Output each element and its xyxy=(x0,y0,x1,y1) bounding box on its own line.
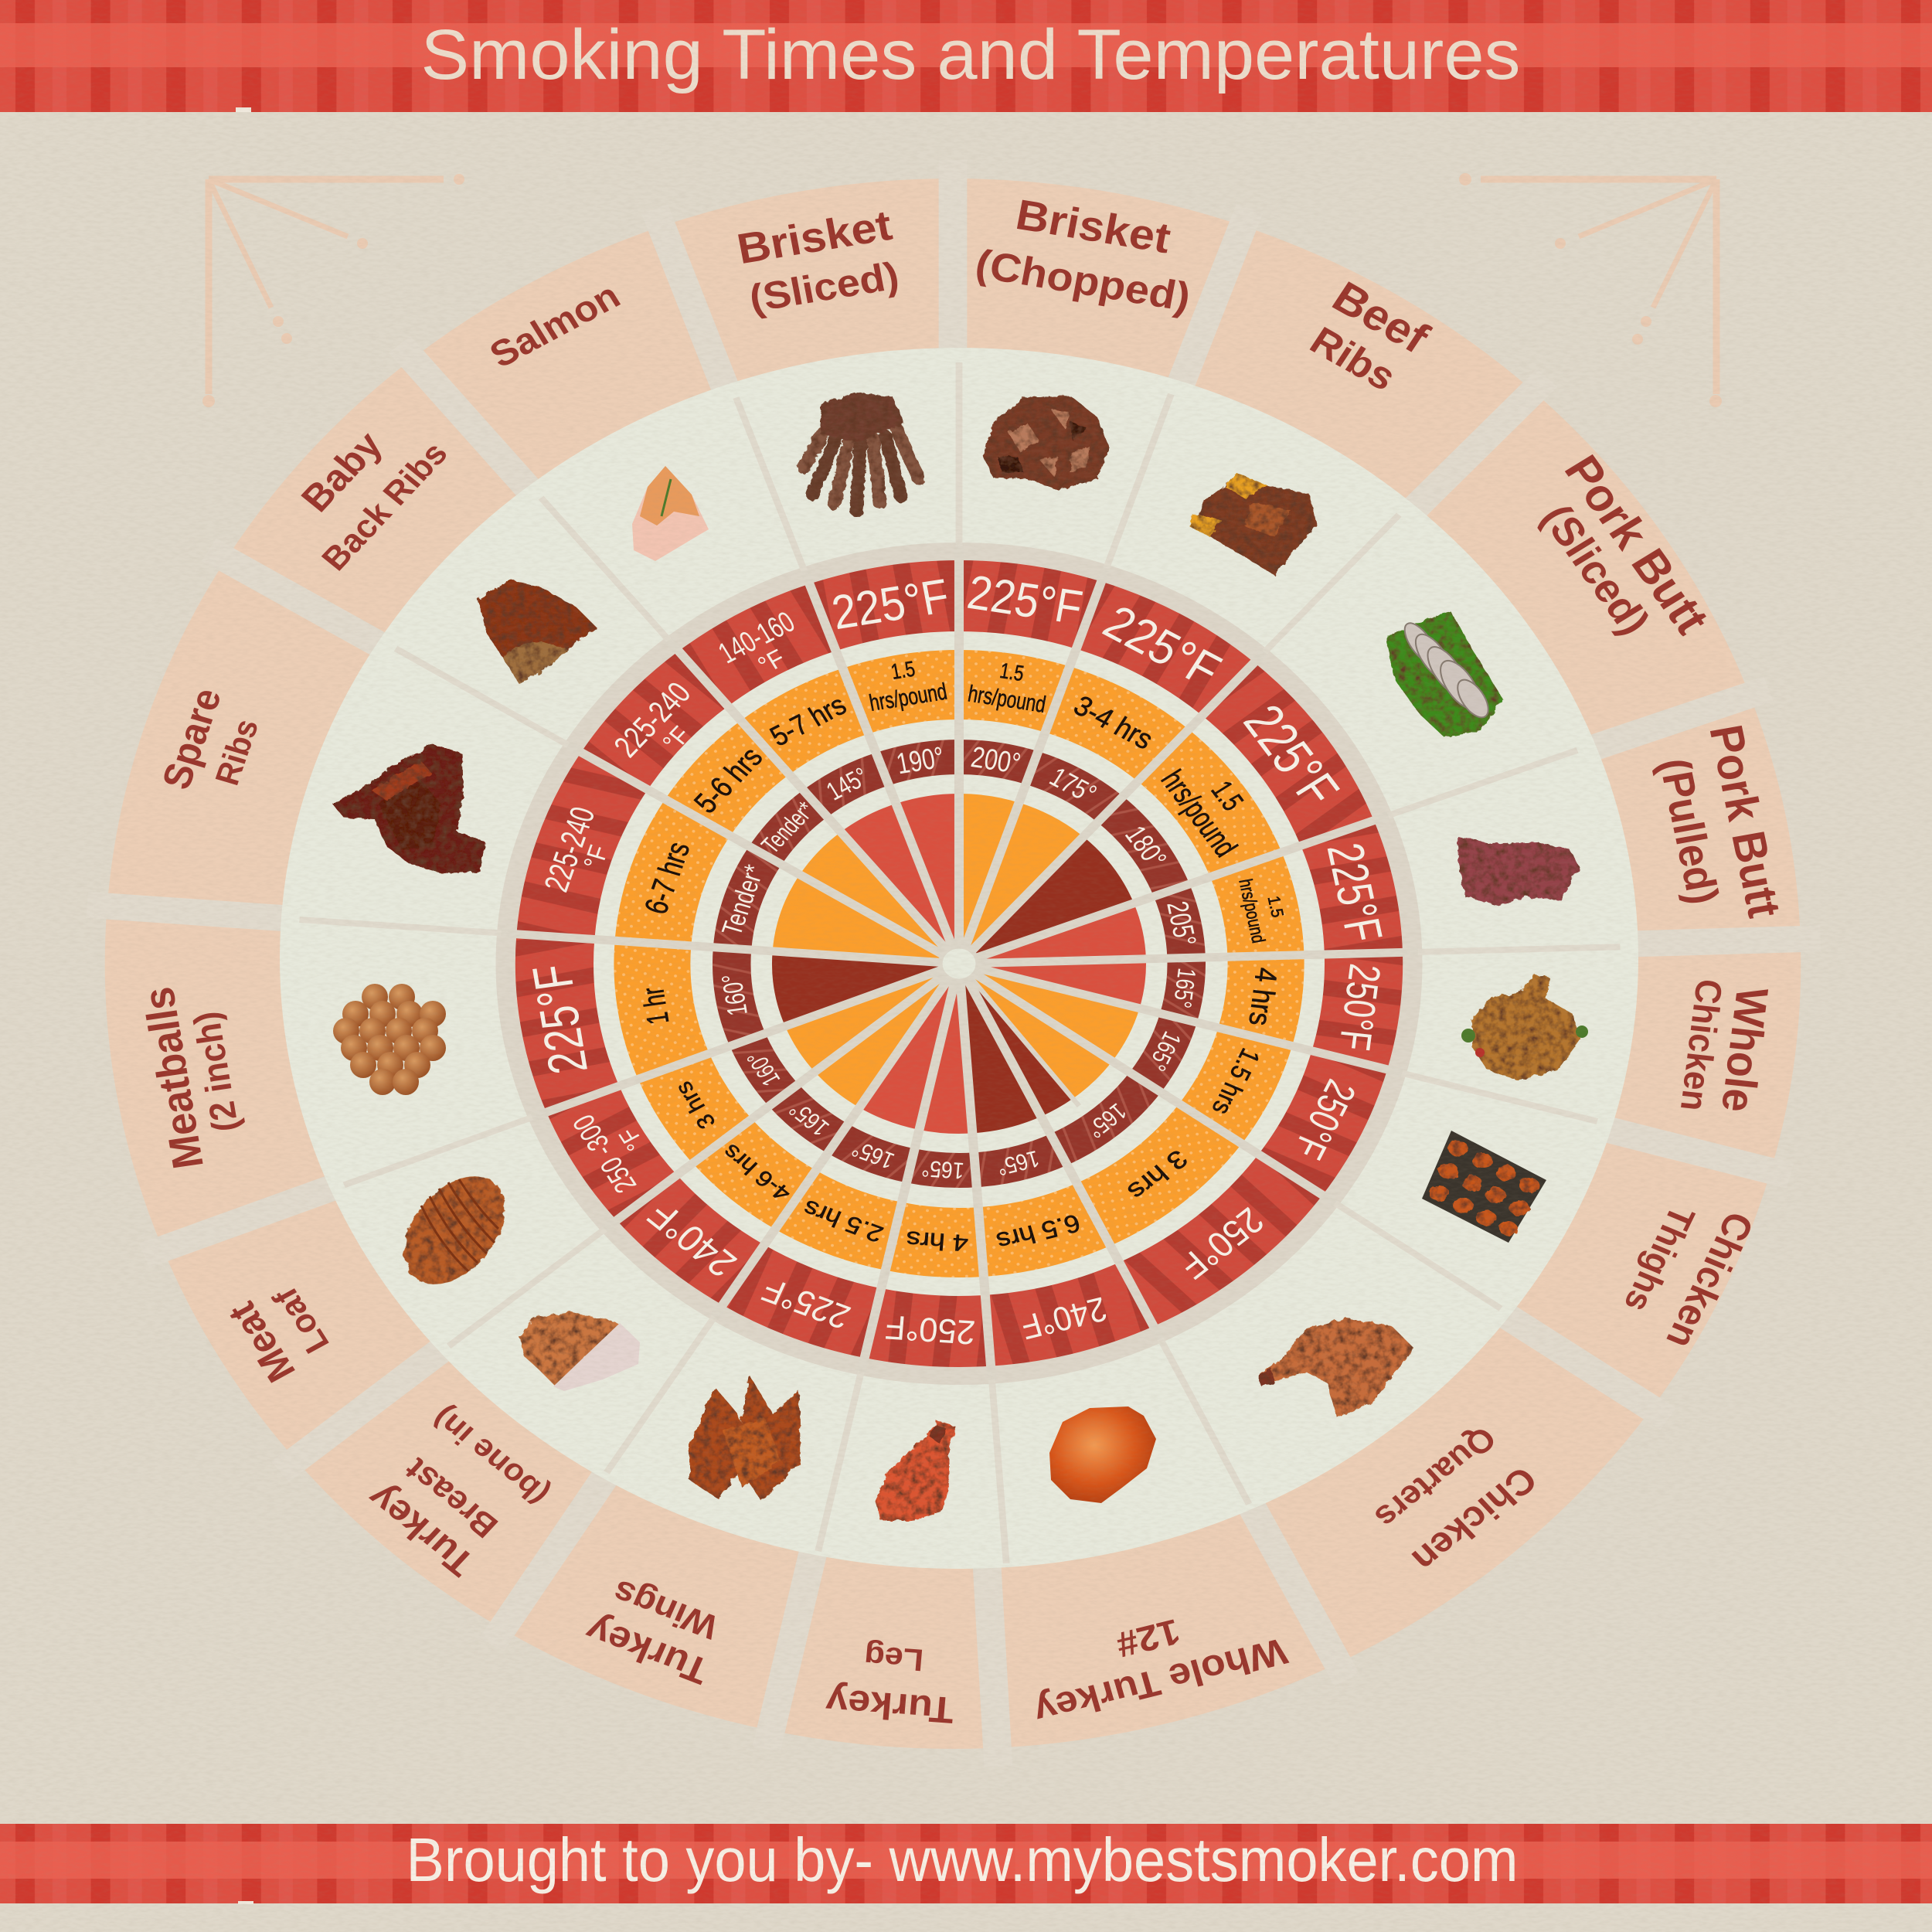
label: Meat Loaf: Meat xyxy=(219,1295,304,1389)
cell: Salmon 140-160F: °F xyxy=(753,645,791,680)
cell: Meat Loaf 250-300F: °F xyxy=(613,1124,650,1155)
label: Pork Butt (Pulled): Pork Butt xyxy=(1699,721,1791,921)
header banner xyxy=(0,0,1932,112)
label: Beef Ribs: Ribs xyxy=(1302,319,1403,400)
cell: Meat Loaf 250-300F xyxy=(389,446,1529,1481)
food icon: whole turkey xyxy=(1049,1406,1156,1503)
cell: Baby Back Ribs 225-240F: 225-240 xyxy=(607,675,698,764)
cell: Baby Back Ribs 225-240F: °F xyxy=(658,722,696,757)
cell: Turkey Wings internal xyxy=(689,718,1230,1209)
label: Turkey Leg: Turkey xyxy=(824,1680,955,1731)
cell: Baby Back Ribs time xyxy=(537,580,1381,1348)
label: Whole Turkey 12#: 12# xyxy=(1111,1611,1185,1665)
cell: Pork Butt Pulled time: hrs/pound xyxy=(1235,877,1270,944)
cell: Pork Butt Pulled time: 1.5 xyxy=(1264,895,1287,919)
cell: Baby Back Ribs internal xyxy=(646,679,1272,1248)
label: Chicken Quarters: Quarters xyxy=(1367,1420,1503,1536)
cell: Turkey Leg time xyxy=(631,665,1287,1262)
cell: Beef Ribs 225F xyxy=(446,498,1472,1430)
cell: Meatballs 225F: 225°F xyxy=(522,961,600,1077)
label: Whole Chicken: Whole xyxy=(1712,985,1778,1114)
title: Smoking Times and Temperatures xyxy=(420,15,1521,94)
cell: Pork Butt Pulled internal xyxy=(665,697,1253,1230)
cell: Spare Ribs 225-240F: 225-240 xyxy=(536,803,602,896)
food icon: whole chicken xyxy=(1461,975,1588,1080)
label: Chicken Thighs: Chicken xyxy=(1658,1206,1763,1355)
label: Turkey Breast (bone in): Breast xyxy=(397,1451,505,1545)
cell: Chicken Thighs 250F: 250°F xyxy=(1284,1073,1365,1165)
food icon: sliced brisket xyxy=(804,393,918,510)
cell: Turkey Wings 225F xyxy=(478,526,1440,1401)
cell: Spare Ribs 225-240F xyxy=(526,570,1393,1358)
cell: Whole Turkey internal xyxy=(655,687,1263,1240)
label: Pork Butt (Sliced): (Sliced) xyxy=(1532,497,1658,643)
cell: Chicken Quarters time: 3 hrs xyxy=(1121,1145,1192,1205)
cell: Brisket Sliced time: hrs/pound xyxy=(867,678,949,716)
cell: Salmon time xyxy=(527,571,1391,1356)
label: Spare Ribs: Ribs xyxy=(208,715,266,789)
food icon: chicken quarter xyxy=(1258,1318,1414,1417)
cell: Beef Ribs 225F: 225°F xyxy=(1094,595,1230,698)
cell: Whole Chicken 250F xyxy=(543,586,1389,1342)
food icon: beef ribs xyxy=(1190,473,1317,576)
label: Spare Ribs xyxy=(151,221,1755,1706)
food icon: turkey breast xyxy=(519,1312,640,1391)
cell: Meatballs time xyxy=(561,601,1357,1326)
label: Baby Back Ribs: Back Ribs xyxy=(315,435,455,577)
cell: Whole Chicken internal xyxy=(726,751,1202,1176)
label: Turkey Leg xyxy=(165,234,1740,1731)
cell: Chicken Quarters 250F: 250°F xyxy=(1171,1199,1272,1286)
cell: Turkey Wings time xyxy=(594,631,1325,1296)
cell: Salmon time: 5-7 hrs xyxy=(765,689,852,753)
label: Turkey Breast (bone in): Turkey xyxy=(359,1477,483,1583)
cell: Pork Butt Sliced 225F: 225°F xyxy=(1232,695,1351,816)
label: Pork Butt (Sliced): Pork Butt xyxy=(1554,447,1720,642)
label: Turkey Wings xyxy=(60,137,1845,1791)
label: Brisket (Chopped): (Chopped) xyxy=(972,241,1194,320)
cell: Chicken Thighs time: 1.5 hrs xyxy=(1206,1044,1265,1118)
food icon: meatballs xyxy=(333,984,446,1095)
footer banner xyxy=(0,1824,1932,1904)
cell: Spare Ribs internal: Tender* xyxy=(716,862,770,939)
cell: Turkey Leg 250F xyxy=(526,570,1392,1357)
label: Pork Butt (Pulled): (Pulled) xyxy=(1650,755,1728,908)
cell: Whole Turkey time xyxy=(549,590,1369,1337)
cell: Salmon 140-160F xyxy=(389,446,1529,1481)
cell: Brisket Sliced time xyxy=(566,607,1352,1321)
cell: Baby Back Ribs time: 5-6 hrs xyxy=(688,741,770,819)
cell: Whole Turkey internal: 165° xyxy=(994,1145,1043,1181)
cell: Beef Ribs internal: 175° xyxy=(1044,761,1102,809)
cell: Turkey Leg time: 4 hrs xyxy=(905,1226,969,1257)
cell: Whole Chicken internal: 165° xyxy=(1168,967,1202,1010)
cell: Whole Turkey 240F: 240°F xyxy=(1016,1290,1111,1347)
cell: Pork Butt Sliced time: 1.5 xyxy=(1204,776,1250,816)
cell: Turkey Leg 250F: 250°F xyxy=(884,1308,977,1352)
cell: Whole Chicken 250F: 250°F xyxy=(1329,961,1389,1053)
cell: Pork Butt Pulled time xyxy=(563,604,1355,1324)
label: Meat Loaf: Loaf xyxy=(265,1281,337,1359)
cell: Brisket Chopped internal xyxy=(732,741,1186,1170)
label: Meatballs (2 inch): Meatballs xyxy=(134,984,213,1172)
cell: Chicken Quarters internal xyxy=(642,675,1276,1252)
cell: Whole Turkey time: 6.5 hrs xyxy=(993,1209,1083,1255)
label: Meatballs (2 inch): (2 inch) xyxy=(185,1009,247,1134)
decorative arrow: top right xyxy=(1459,173,1722,407)
cell: Whole Turkey 240F xyxy=(418,472,1500,1455)
cell: Turkey Wings time: 2.5 hrs xyxy=(799,1195,887,1248)
ring: internal temperature xyxy=(638,672,1280,1256)
cell: Brisket Sliced time: 1.5 xyxy=(889,657,917,684)
cell: Spare Ribs internal xyxy=(716,743,1202,1185)
label: Turkey Wings: Wings xyxy=(607,1573,724,1646)
label: Turkey Wings: Turkey xyxy=(579,1609,715,1692)
food icon: turkey wings xyxy=(689,1376,801,1501)
cell: Turkey Breast 240F: 240°F xyxy=(639,1194,745,1285)
label: Brisket (Chopped): Brisket xyxy=(1012,191,1175,263)
cell: Turkey Leg internal: 165° xyxy=(920,1155,965,1185)
data wheel xyxy=(299,362,1620,1563)
cell: Meat Loaf internal: 160° xyxy=(741,1046,786,1090)
cell: Spare Ribs time xyxy=(631,665,1287,1262)
label: Chicken Thighs: Thighs xyxy=(1616,1200,1702,1318)
label: Beef Ribs: Beef xyxy=(1324,272,1437,362)
cell: Meat Loaf 250-300F: 250 -300 xyxy=(566,1109,644,1198)
cell: Turkey Wings 225F: 225°F xyxy=(757,1270,855,1337)
cell: Chicken Thighs 250F xyxy=(462,512,1456,1415)
cell: Turkey Breast internal: 165° xyxy=(784,1096,835,1141)
cell: Meat Loaf internal xyxy=(639,672,1279,1255)
food icon: spare ribs xyxy=(332,743,485,873)
cell: Brisket Chopped 225F xyxy=(554,565,1364,1332)
cell: Chicken Quarters time xyxy=(532,575,1386,1352)
label: Brisket (Chopped) xyxy=(203,191,1702,1658)
label: Turkey Leg: Leg xyxy=(862,1639,925,1678)
cell: Turkey Wings internal: 165° xyxy=(848,1135,898,1175)
cell: Meatballs 225F xyxy=(434,486,1485,1441)
cell: Brisket Chopped time xyxy=(652,658,1266,1243)
cell: Beef Ribs time xyxy=(570,610,1348,1318)
cell: Meat Loaf time xyxy=(527,571,1391,1356)
label: Whole Turkey 12#: Whole Turkey xyxy=(1029,1630,1291,1733)
label: Baby Back Ribs: Baby xyxy=(293,423,391,519)
cell: Chicken Thighs internal xyxy=(680,710,1238,1217)
beige band around the wheel xyxy=(505,552,1413,1376)
ring: cooking time xyxy=(526,570,1393,1358)
ring: smoker temperature xyxy=(388,444,1530,1483)
cell: Brisket Chopped time: 1.5 xyxy=(998,658,1026,686)
cell: Brisket Chopped internal: 200° xyxy=(968,741,1023,781)
cell: Beef Ribs time: 3-4 hrs xyxy=(1068,690,1158,756)
cell: Baby Back Ribs internal: Tender* xyxy=(756,797,820,859)
center hub xyxy=(940,947,978,981)
footer credit: Brought to you by- www.mybestsmoker.com xyxy=(406,1825,1518,1894)
cell: Meatballs time: 1 hr xyxy=(636,985,676,1026)
label: Turkey Breast (bone in): (bone in) xyxy=(425,1400,556,1512)
cell: Brisket Chopped time: hrs/pound xyxy=(966,680,1048,718)
cell: Salmon internal xyxy=(639,673,1279,1254)
food icon: chicken thighs on tray xyxy=(1422,1131,1546,1243)
white disc holding the food photos xyxy=(280,348,1638,1569)
cell: Brisket Chopped 225F: 225°F xyxy=(964,565,1087,634)
food icon: baby back ribs xyxy=(478,580,597,684)
label: Whole Chicken: Chicken xyxy=(1672,978,1730,1113)
cell: Meatballs internal: 160° xyxy=(716,972,753,1018)
cell: Chicken Thighs time xyxy=(583,621,1335,1306)
cell: Brisket Sliced 225F xyxy=(442,493,1476,1434)
food icon: chopped brisket xyxy=(983,396,1110,490)
cell: Spare Ribs time: 6-7 hrs xyxy=(638,838,697,918)
label: Chicken Quarters: Chicken xyxy=(1404,1459,1544,1579)
cell: Meatballs internal xyxy=(664,696,1254,1232)
cell: Chicken Thighs internal: 165° xyxy=(1142,1028,1188,1075)
label: Spare Ribs: Spare xyxy=(153,683,230,794)
food icon: meat loaf xyxy=(384,1157,525,1304)
food icon: salmon xyxy=(632,466,709,561)
cell: Beef Ribs internal xyxy=(671,702,1247,1226)
cell: Pork Butt Sliced time xyxy=(526,570,1393,1358)
cell: Pork Butt Pulled 225F xyxy=(437,489,1481,1438)
cell: Pork Butt Pulled 225F: 225°F xyxy=(1316,839,1393,946)
label: Brisket (Sliced): (Sliced) xyxy=(746,254,903,321)
cell: Turkey Breast internal xyxy=(645,679,1273,1249)
cell: Brisket Sliced internal xyxy=(668,699,1250,1228)
cell: Meat Loaf time: 3 hrs xyxy=(670,1077,721,1133)
food icon: sliced pork butt on greens xyxy=(1385,612,1503,738)
cell: Whole Chicken time: 4 hrs xyxy=(1242,966,1283,1027)
label: Brisket (Sliced): Brisket xyxy=(733,202,896,274)
cell: Salmon internal: 145° xyxy=(821,763,874,806)
food icon: pulled pork xyxy=(1458,836,1580,906)
cell: Whole Chicken time xyxy=(644,677,1283,1250)
cell: Brisket Sliced internal: 190° xyxy=(894,741,947,781)
cell: Pork Butt Sliced internal xyxy=(638,672,1280,1256)
cell: Turkey Breast time xyxy=(536,579,1383,1349)
cell: Baby Back Ribs 225-240F xyxy=(403,457,1515,1470)
cell: Spare Ribs 225-240F: °F xyxy=(579,842,615,872)
label: Salmon: Salmon xyxy=(483,275,628,376)
cell: Turkey Leg internal xyxy=(716,743,1202,1185)
cell: Chicken Quarters internal: 165° xyxy=(1081,1098,1132,1144)
label: Whole Chicken xyxy=(180,248,1778,1679)
cell: Brisket Sliced 225F: 225°F xyxy=(828,569,953,640)
center pie: meat category wedges xyxy=(827,844,1091,1083)
food icon: turkey leg xyxy=(875,1420,955,1521)
cell: Turkey Breast time: 4-6 hrs xyxy=(718,1139,796,1206)
cell: Pork Butt Sliced time: hrs/pound xyxy=(1154,764,1243,862)
cell: Pork Butt Pulled internal: 205° xyxy=(1161,899,1202,948)
cell: Pork Butt Sliced internal: 180° xyxy=(1119,821,1173,873)
decorative arrow: top left xyxy=(202,174,464,407)
cell: Salmon 140-160F: 140-160 xyxy=(713,606,801,670)
